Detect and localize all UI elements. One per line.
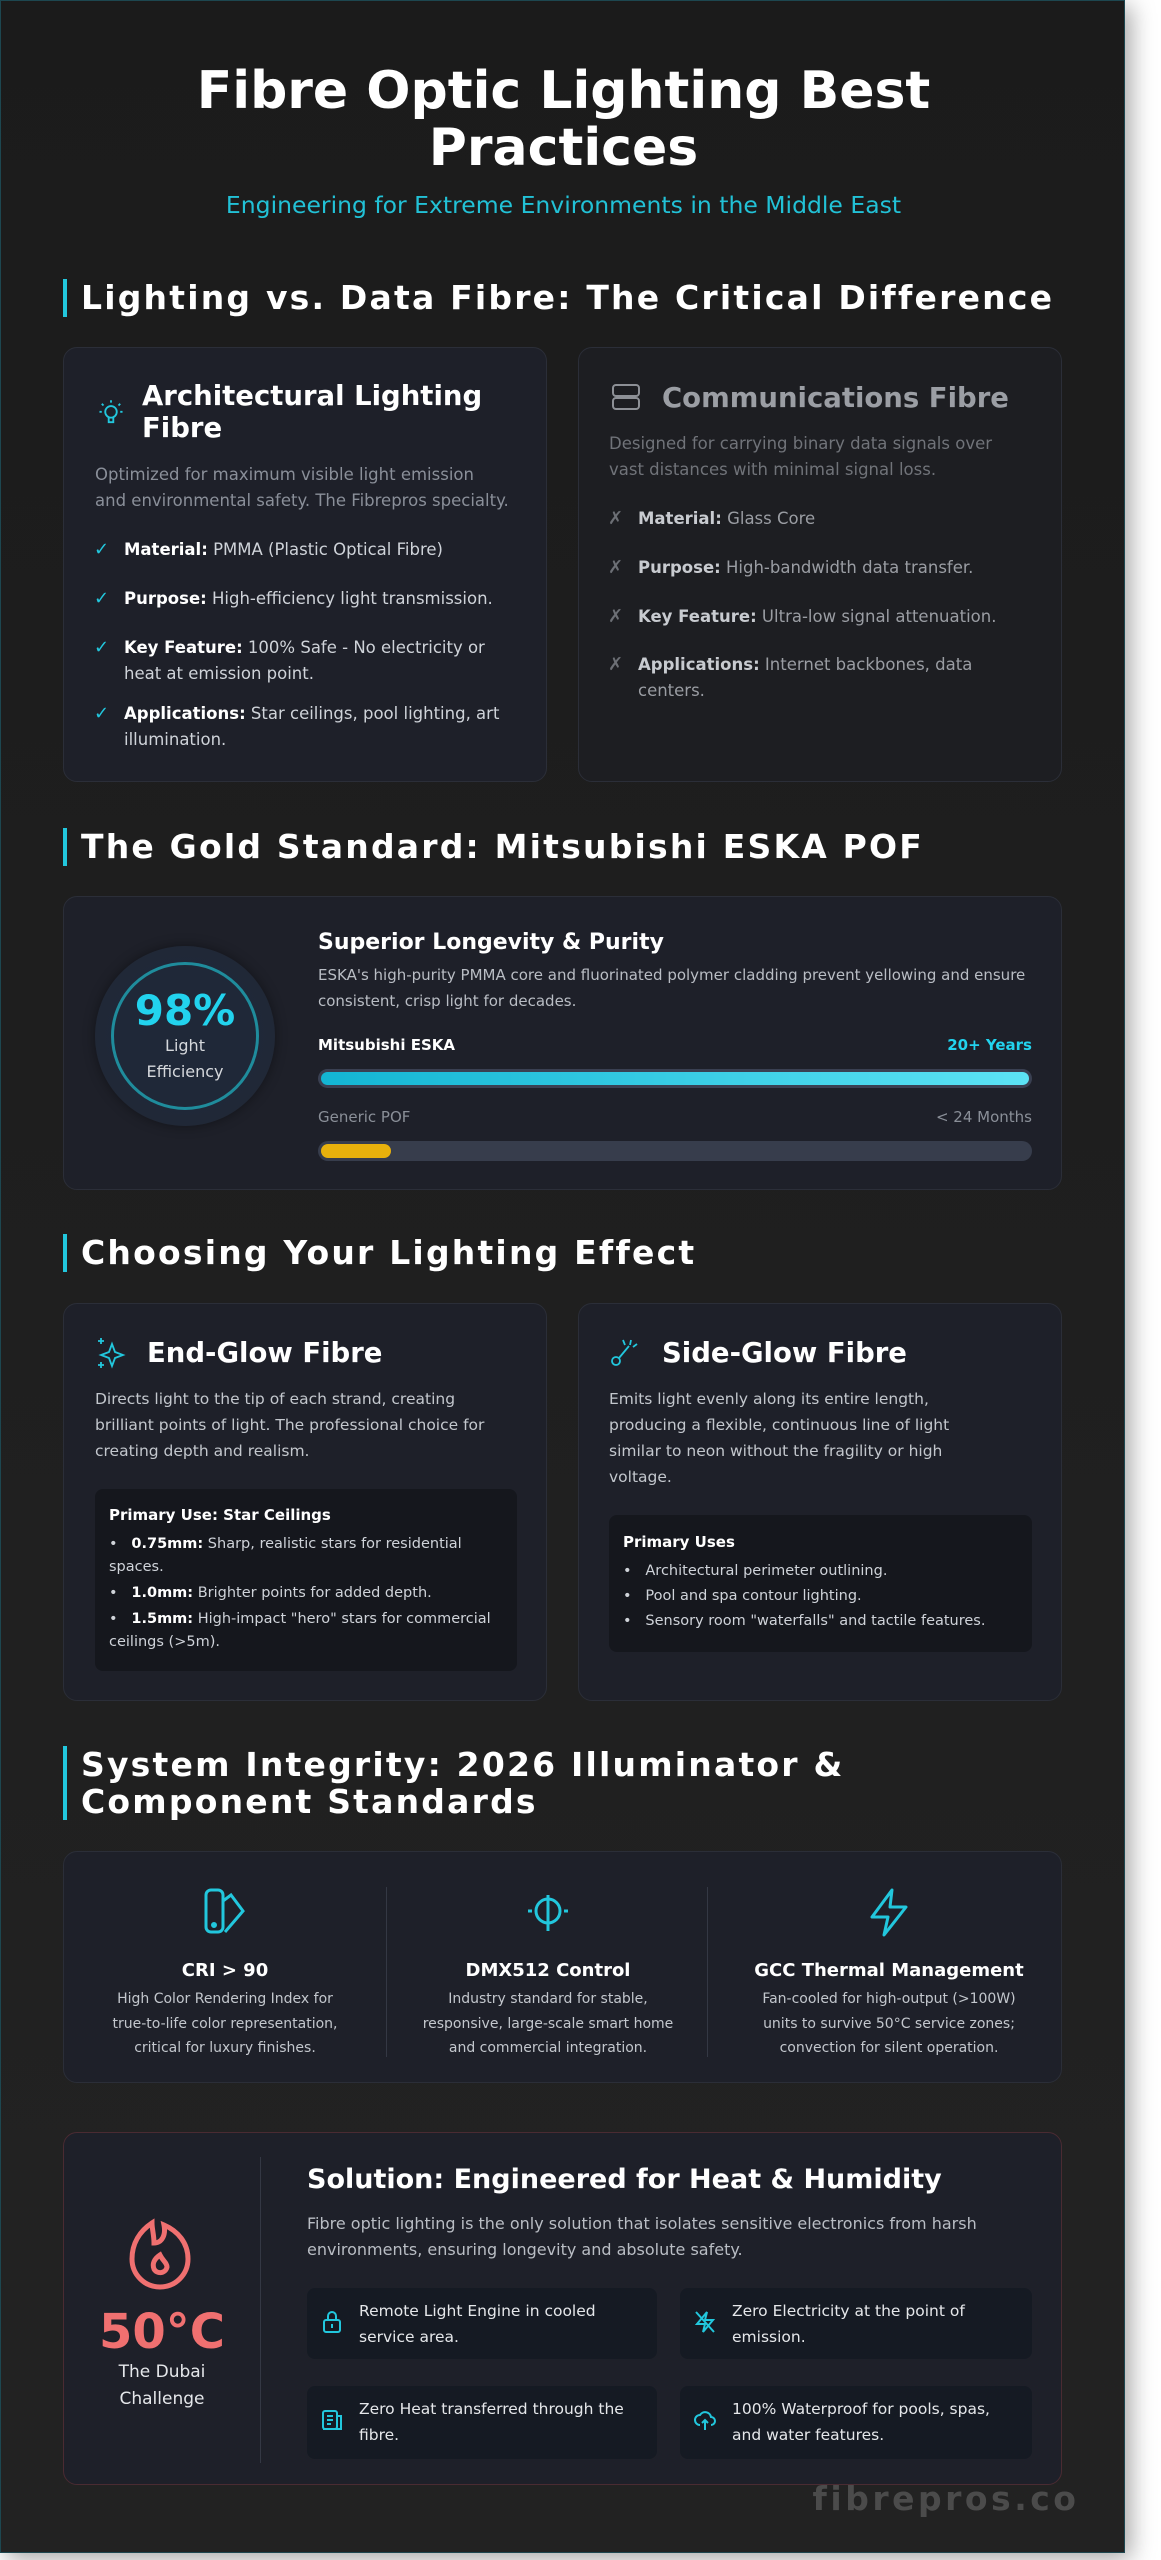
column: thermal xyxy=(754,1888,1024,2056)
description xyxy=(95,465,509,510)
bar: ESKA: 20+ Years xyxy=(947,1036,1032,1054)
feature: zero electricity xyxy=(680,2288,1032,2359)
bar: generic POF: Generic POF xyxy=(318,1108,410,1126)
stat: 50°C: 50°C xyxy=(99,2304,225,2360)
solution title: Solution: Engineered for Heat & Humidity xyxy=(307,2164,942,2195)
bar: ESKA: Mitsubishi ESKA xyxy=(318,1036,455,1054)
panel: architectural lighting fibre: ✓ xyxy=(94,539,109,560)
column: CRI: CRI > 90 xyxy=(182,1960,268,1981)
list item: Key Feature: Ultra-low signal attenuation. xyxy=(638,607,996,626)
column: CRI xyxy=(112,1888,337,2056)
description: Emits light evenly along its entire length, producing a flexible, continuous line of light similar to neon without the fragility or high voltage. xyxy=(609,1390,949,1486)
feature: remote engine xyxy=(307,2288,657,2359)
card title: Architectural Lighting xyxy=(142,380,482,412)
stat: 50°C xyxy=(99,2304,225,2409)
description: Designed for carrying binary data signals over vast distances with minimal signal loss. xyxy=(609,434,992,479)
box: primary uses: • Pool and spa contour lighting. xyxy=(623,1588,862,1604)
gauge: 98%: Efficiency xyxy=(146,1062,224,1081)
bar: ESKA xyxy=(318,1036,1032,1088)
description: and environmental safety. The Fibrepros specialty. xyxy=(95,491,509,510)
heading: lighting vs data: Lighting vs. Data Fibre: The Critical Difference xyxy=(81,278,1054,317)
panel: communications fibre: ✗ xyxy=(608,606,623,627)
card title: End-Glow Fibre xyxy=(147,1337,382,1369)
column: DMX xyxy=(423,1895,673,2056)
heading: lighting effect: Choosing Your Lighting Effect xyxy=(81,1233,696,1272)
box: star ceilings: • 0.75mm: Sharp, realistic stars for residential spaces. xyxy=(109,1536,462,1575)
panel: architectural lighting fibre: ✓ xyxy=(94,703,109,724)
icon: wand xyxy=(611,1340,638,1366)
list item: Purpose: High-bandwidth data transfer. xyxy=(638,558,973,577)
box: primary uses xyxy=(609,1515,1032,1652)
list item: Key Feature: 100% Safe - No electricity or heat at emission point. xyxy=(124,638,485,683)
panel: ESKA xyxy=(63,896,1062,1190)
icon: bolt xyxy=(870,1888,908,1936)
panel: architectural lighting fibre: ✓ xyxy=(94,588,109,609)
icon: flame xyxy=(130,2218,190,2290)
box: primary uses: • Sensory room "waterfalls" and tactile features. xyxy=(623,1613,985,1629)
panel: architectural lighting fibre xyxy=(63,347,547,782)
stat: 50°C: The Dubai xyxy=(119,2362,205,2382)
panel: communications fibre xyxy=(578,347,1062,782)
gauge: 98%: Light xyxy=(165,1036,205,1055)
heading: system integrity: System Integrity: 2026 Illuminator & xyxy=(81,1745,844,1784)
title: Practices xyxy=(429,118,698,178)
box: primary uses: Primary Uses xyxy=(623,1533,735,1551)
feature: waterproof xyxy=(680,2386,1032,2459)
gauge: 98%: 98% xyxy=(135,986,235,1035)
list item: Material: PMMA (Plastic Optical Fibre) xyxy=(124,540,443,559)
feature: remote engine: Remote Light Engine in cooled service area. xyxy=(359,2302,596,2346)
list item: Material: Glass Core xyxy=(638,509,815,528)
feature: waterproof: 100% Waterproof for pools, spas, and water features. xyxy=(732,2400,990,2444)
card title: Fibre xyxy=(142,412,222,444)
panel: standards xyxy=(63,1851,1062,2083)
gauge: 98% xyxy=(95,946,275,1126)
icon: dial xyxy=(528,1895,568,1931)
description: Optimized for maximum visible light emission xyxy=(95,465,474,484)
title xyxy=(197,61,930,178)
box: star ceilings: • 1.0mm: Brighter points for added depth. xyxy=(109,1585,432,1601)
subtitle: Engineering for Extreme Environments in the Middle East xyxy=(226,191,901,219)
column: thermal: GCC Thermal Management xyxy=(754,1960,1024,1981)
icon: sparkles xyxy=(98,1338,126,1368)
panel: dubai challenge xyxy=(63,2132,1062,2485)
heading: system integrity: Component Standards xyxy=(81,1782,538,1821)
panel: communications fibre: ✗ xyxy=(608,508,623,529)
panel: end-glow xyxy=(63,1303,547,1701)
description: Directs light to the tip of each strand, creating brilliant points of light. The professional choice for creating depth and realism. xyxy=(95,1390,484,1460)
bar: generic POF: < 24 Months xyxy=(936,1108,1032,1126)
card title: Communications Fibre xyxy=(662,382,1009,414)
icon: bulb xyxy=(99,400,123,424)
panel: side-glow xyxy=(578,1303,1062,1701)
stat: 50°C: Challenge xyxy=(120,2389,204,2409)
list item: Applications: Internet backbones, data centers. xyxy=(638,655,972,700)
panel: communications fibre: ✗ xyxy=(608,654,623,675)
heading: gold standard: The Gold Standard: Mitsubishi ESKA POF xyxy=(81,827,924,866)
icon: server xyxy=(612,384,640,410)
bar: generic POF xyxy=(318,1108,1032,1161)
panel: architectural lighting fibre: ✓ xyxy=(94,637,109,658)
list item: Applications: Star ceilings, pool lighting, art illumination. xyxy=(124,704,499,749)
solution description: Fibre optic lighting is the only solution that isolates sensitive electronics from harsh environments, ensuring longevity and absolute safety. xyxy=(307,2214,977,2259)
box: star ceilings: • 1.5mm: High-impact "hero" stars for commercial ceilings (>5m). xyxy=(109,1611,491,1650)
feature: zero heat: Zero Heat transferred through the fibre. xyxy=(359,2400,624,2444)
icon: swatch xyxy=(204,1888,245,1934)
feature: zero electricity: Zero Electricity at the point of emission. xyxy=(732,2302,965,2346)
column: DMX: DMX512 Control xyxy=(466,1960,630,1981)
title: Fibre Optic Lighting Best xyxy=(197,61,930,121)
card title xyxy=(142,380,482,444)
column: thermal: Fan-cooled for high-output (>100W) units to survive 50°C service zones; convection for silent operation. xyxy=(762,1991,1016,2056)
box: primary uses: • Architectural perimeter outlining. xyxy=(623,1563,887,1579)
list item: Purpose: High-efficiency light transmission. xyxy=(124,589,493,608)
box: star ceilings: Primary Use: Star Ceilings xyxy=(109,1506,331,1524)
heading: system integrity xyxy=(63,1746,844,1820)
feature: zero heat xyxy=(307,2386,657,2459)
watermark: fibrepros.co xyxy=(813,2479,1079,2518)
subheading: Superior Longevity & Purity xyxy=(318,930,664,955)
column: DMX: Industry standard for stable, responsive, large-scale smart home and commercial integration. xyxy=(423,1991,673,2056)
panel: communications fibre: ✗ xyxy=(608,557,623,578)
card title: Side-Glow Fibre xyxy=(662,1337,907,1369)
column: CRI: High Color Rendering Index for true-to-life color representation, critical for luxury finishes. xyxy=(112,1991,337,2056)
description: ESKA's high-purity PMMA core and fluorinated polymer cladding prevent yellowing and ensure consistent, crisp light for decades. xyxy=(318,966,1025,1010)
box: star ceilings xyxy=(95,1489,517,1671)
